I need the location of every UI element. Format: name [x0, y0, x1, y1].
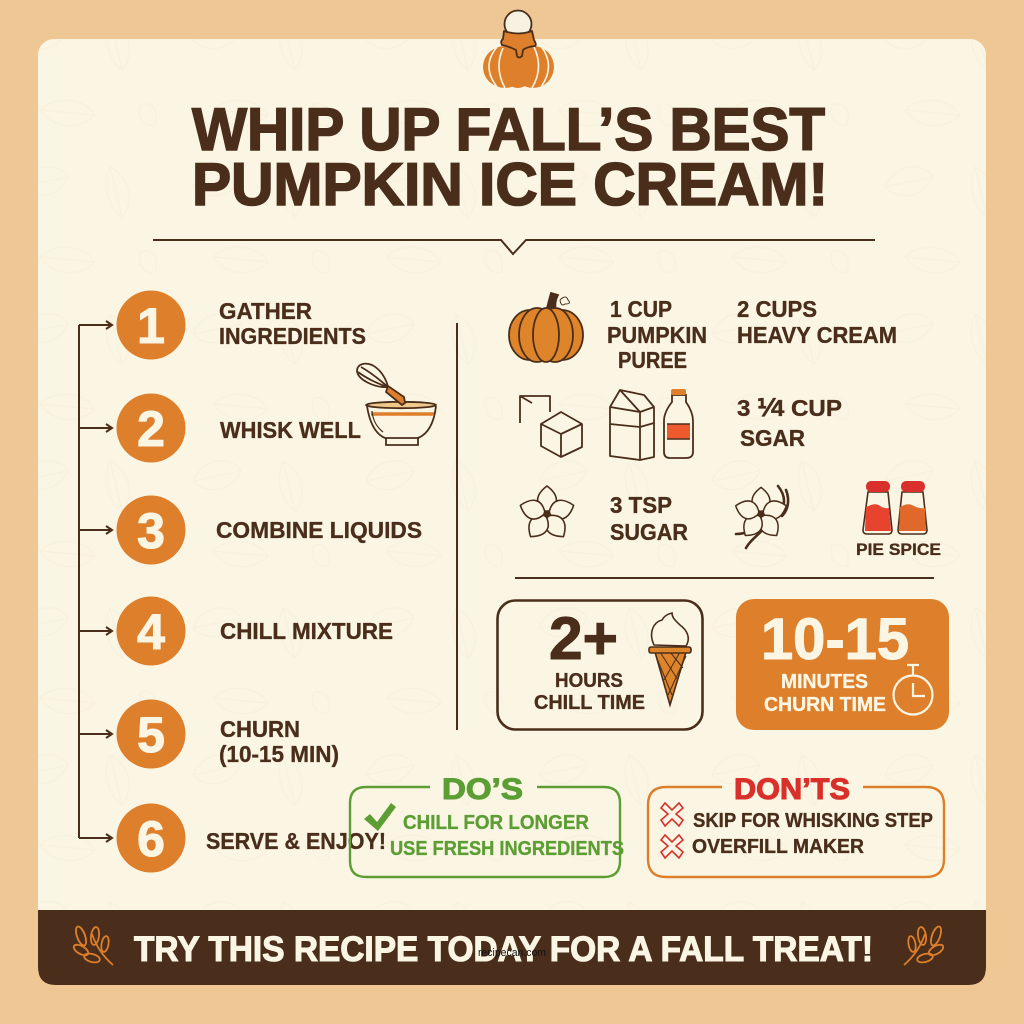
icon: spice shakers [863, 481, 927, 534]
ingredient: heavy cream [737, 296, 897, 348]
step 5 [116, 700, 339, 768]
ingredient: teaspoons [610, 492, 688, 545]
panel: do's: DO’S [442, 773, 523, 806]
ingredient: sugar: SGAR [740, 425, 805, 451]
icon: sugar cube [520, 396, 582, 457]
step 2: 2 [137, 401, 165, 457]
label: pie spice: PIE SPICE [856, 540, 941, 559]
step 5: 5 [137, 707, 165, 763]
panel: chill time [498, 600, 702, 730]
ingredient: pumpkin puree [607, 296, 707, 373]
panel: chill time: 2+ [549, 605, 618, 672]
step 1 [116, 290, 366, 360]
step 1: INGREDIENTS [219, 323, 366, 349]
step 1: GATHER [219, 298, 312, 324]
step 2: WHISK WELL [220, 417, 361, 443]
ingredient: teaspoons: 3 TSP [610, 492, 672, 518]
icon: pumpkin [509, 293, 583, 362]
footer banner: TRY THIS RECIPE TODAY FOR A FALL TREAT! [134, 930, 873, 969]
panel: churn time: MINUTES [781, 671, 868, 693]
icon: stopwatch [894, 665, 932, 714]
ingredient: pumpkin puree: 1 CUP [610, 296, 672, 322]
step 4 [116, 596, 393, 666]
icon: red cross 1 [661, 803, 683, 826]
step 6: SERVE & ENJOY! [206, 828, 386, 854]
ingredient: heavy cream: HEAVY CREAM [737, 322, 897, 348]
panel: chill time: HOURS [555, 670, 623, 692]
panel: do's [350, 773, 624, 877]
ingredient: pumpkin puree: PUREE [618, 347, 687, 373]
ingredient: sugar: 3 ⅟4 CUP [737, 395, 842, 421]
title: PUMPKIN ICE CREAM! [192, 151, 828, 218]
icon: right laurel [904, 925, 945, 965]
icon: pumpkin with ice cream scoop [483, 10, 554, 88]
footer banner [38, 910, 986, 985]
icon: whisk and bowl [357, 364, 436, 445]
step 4: CHILL MIXTURE [220, 618, 393, 644]
ingredient: pumpkin puree: PUMPKIN [607, 322, 707, 348]
step 6 [116, 804, 386, 872]
panel: churn time [736, 599, 949, 730]
panel: don'ts: DON’TS [734, 773, 850, 806]
panel: don'ts [648, 773, 944, 877]
icon: check mark [364, 803, 396, 831]
panel: churn time: CHURN TIME [764, 694, 886, 716]
icon: ice cream cone [649, 613, 691, 705]
step 5: (10-15 MIN) [219, 741, 339, 767]
icon: milk bottle [664, 389, 693, 458]
title: WHIP UP FALL’S BEST [192, 96, 825, 163]
icon: milk carton [610, 390, 654, 460]
ingredient: heavy cream: 2 CUPS [737, 296, 817, 322]
ingredient: teaspoons: SUGAR [610, 519, 688, 545]
ingredient: sugar [737, 395, 842, 451]
panel: do's: CHILL FOR LONGER [403, 812, 590, 834]
step 2 [116, 394, 361, 462]
step 3: COMBINE LIQUIDS [216, 517, 422, 543]
panel: do's: USE FRESH INGREDIENTS [390, 838, 624, 860]
timeline bracket with arrows [79, 321, 112, 842]
panel: chill time: CHILL TIME [534, 692, 645, 714]
watermark: recipecan.com [478, 947, 546, 959]
step 3: 3 [137, 503, 165, 559]
icon: left laurel [72, 925, 113, 965]
panel: don'ts: SKIP FOR WHISKING STEP [693, 810, 933, 832]
panel: don'ts: OVERFILL MAKER [692, 836, 865, 858]
icon: red cross 2 [661, 835, 683, 858]
step 5: CHURN [220, 716, 300, 742]
step 3 [116, 496, 422, 564]
step 1: 1 [137, 298, 165, 354]
icon: flower [517, 486, 577, 542]
icon: vanilla flower and pods [733, 486, 789, 548]
step 6: 6 [137, 811, 165, 867]
panel: churn time: 10-15 [761, 607, 909, 672]
title [192, 96, 828, 218]
step 4: 4 [137, 604, 165, 660]
